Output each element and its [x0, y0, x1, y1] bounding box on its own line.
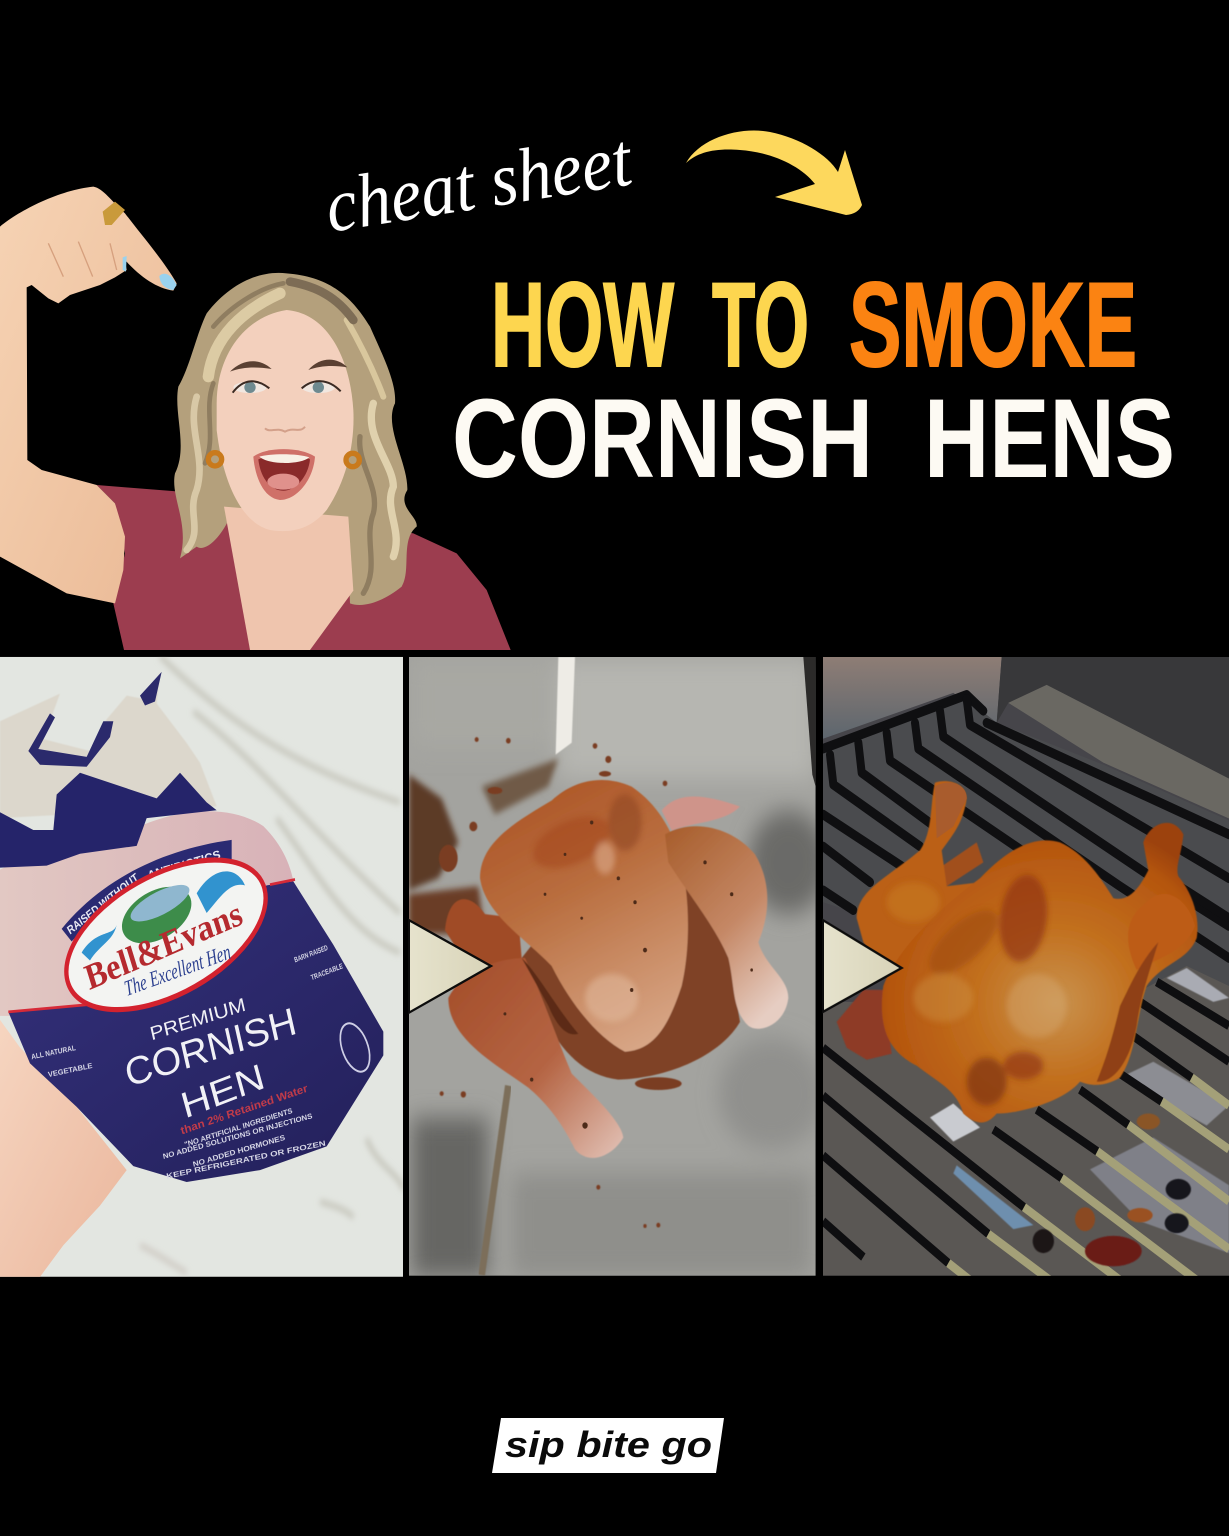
back interior: [997, 657, 1229, 779]
navy top fold: [0, 773, 217, 868]
grill background: [823, 657, 1229, 1276]
serrated paper edge: [803, 657, 816, 787]
brand logo oval: [64, 857, 268, 1012]
arrow: yellow curved arrow: [686, 130, 862, 215]
package red stripe: [8, 879, 295, 1012]
lower body: [522, 878, 740, 1080]
inner shadow: [522, 958, 578, 1034]
gold bar ends: [948, 1078, 1229, 1280]
rub highlights: [528, 795, 642, 1022]
package small print: TRACEABLE: [310, 963, 344, 982]
marble background: [0, 657, 403, 1277]
brand logo oval: Bell&Evans: [80, 894, 247, 998]
photo: woman pointing: [0, 187, 511, 650]
title: HOW: [491, 258, 674, 392]
pepper flecks: [504, 820, 753, 1129]
right drumstick: [665, 826, 788, 1029]
parchment shading: [412, 659, 828, 1277]
hand: [0, 1020, 127, 1277]
panel: raw packaged cornish hen on marble: [0, 656, 403, 1277]
title: [452, 258, 1175, 501]
plastic wrap: [0, 672, 217, 818]
package small print: VEGETABLE: [48, 1062, 93, 1079]
antibiotics banner: [62, 840, 232, 942]
parchment background: [409, 657, 816, 1276]
package small print: than 2% Retained Water: [180, 1083, 309, 1138]
drippings: [1033, 1114, 1191, 1266]
back wall: [823, 657, 1002, 739]
parchment fold: [556, 657, 575, 755]
handwritten label: cheat sheet: cheat sheet: [320, 117, 639, 249]
arm and hand: [0, 187, 177, 603]
panel: seasoned raw hen on parchment: [409, 657, 828, 1277]
logo: sip bite go: [492, 1418, 724, 1473]
package small print: BARN RAISED: [294, 945, 329, 965]
nose: [265, 427, 305, 432]
spice splatter: [439, 737, 682, 1228]
logo: sip bite go: sip bite go: [505, 1424, 712, 1465]
panel: smoked hen on grill: [823, 657, 1229, 1280]
shirt: [97, 485, 511, 650]
breast: [480, 780, 688, 1052]
left leg: [857, 781, 980, 974]
lower grate floor: [823, 966, 1229, 1276]
mouth: [253, 449, 315, 500]
title: HENS: [924, 376, 1175, 501]
back wing: [445, 899, 522, 974]
play arrow overlay: [823, 920, 902, 1012]
package name: [126, 998, 296, 1118]
main body: [882, 823, 1198, 1122]
finger creases: [48, 242, 117, 277]
upper grill rack: [823, 695, 1229, 958]
ring: [103, 202, 125, 225]
antibiotics banner: ANTIBIOTICS: [146, 848, 222, 883]
lower wing: [837, 990, 892, 1060]
left drumstick: [448, 958, 623, 1158]
play arrow overlay: [409, 920, 491, 1013]
glaze streaks: [887, 870, 1067, 1106]
face: [217, 310, 354, 531]
title: CORNISH: [452, 376, 873, 501]
leg tips: [935, 783, 967, 838]
upper left stain: [409, 759, 558, 934]
package small print: "NO ARTIFICIAL INGREDIENTS: [184, 1108, 294, 1149]
package small print: ALL NATURAL: [31, 1045, 77, 1061]
eyes: [233, 381, 341, 393]
top wing tip: [662, 797, 740, 830]
earrings: [208, 453, 359, 467]
antibiotics banner: RAISED WITHOUT: [65, 871, 141, 937]
lower grill bars: [823, 982, 1229, 1263]
package seal: [340, 1022, 370, 1073]
neck and chest: [224, 507, 353, 650]
brand logo oval: The Excellent Hen: [122, 940, 233, 1001]
package name: HEN: [177, 1057, 269, 1127]
package small print: NO ADDED HORMONES: [192, 1134, 286, 1169]
brows: [230, 360, 347, 372]
hen breast under plastic: [0, 811, 295, 1016]
navy wrap scraps: [28, 672, 162, 767]
upper rack floor: [986, 714, 995, 722]
right leg highlight: [1128, 894, 1195, 970]
package name: PREMIUM: [148, 993, 248, 1045]
far wing: [942, 842, 983, 886]
package small print: [31, 945, 344, 1181]
foil patches: [930, 968, 1229, 1253]
title: TO: [712, 258, 809, 392]
marble veins: [140, 656, 403, 1273]
blue package: [8, 881, 383, 1182]
bottom crease: [482, 1086, 508, 1275]
hair strands: [187, 282, 396, 593]
package name: CORNISH: [121, 1000, 300, 1095]
nails: [123, 256, 177, 290]
package small print: NO ADDED SOLUTIONS OR INJECTIONS: [162, 1113, 314, 1161]
package small print: KEEP REFRIGERATED OR FROZEN: [166, 1140, 326, 1181]
side shadow: [1097, 942, 1158, 1082]
stone slab: [1008, 685, 1229, 818]
hair: [174, 273, 417, 605]
